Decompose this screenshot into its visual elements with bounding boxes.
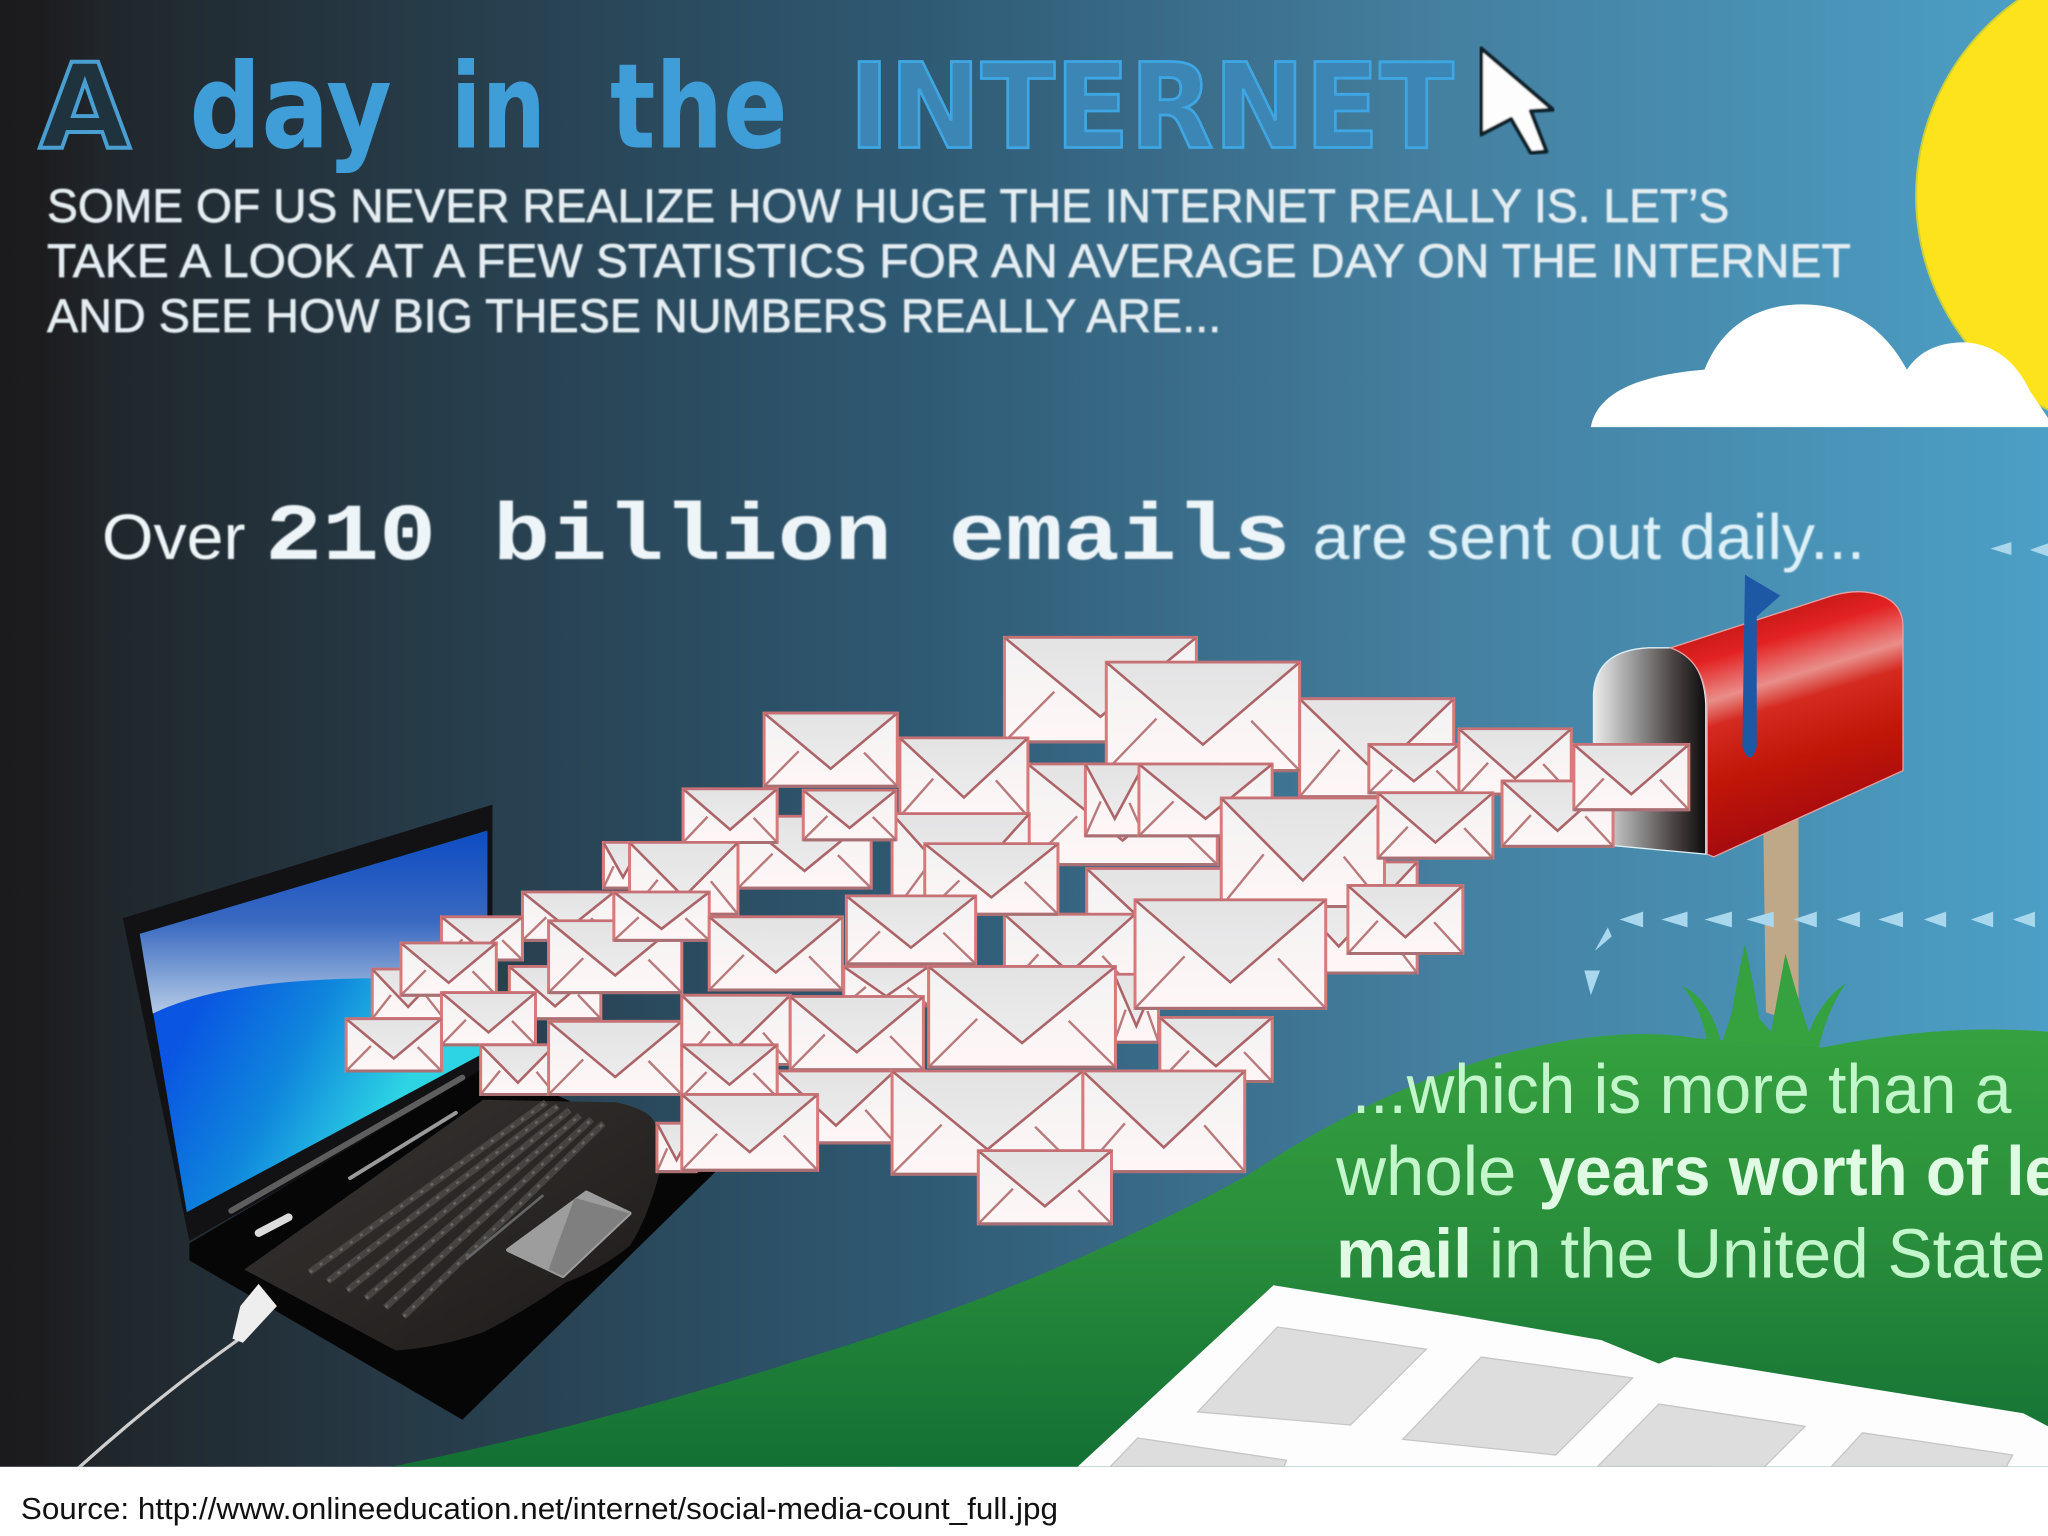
envelope	[1004, 914, 1135, 991]
title: the	[610, 39, 788, 176]
envelope	[346, 1019, 441, 1071]
envelope	[929, 967, 1115, 1067]
envelope	[683, 789, 777, 842]
email headline: Over	[102, 501, 246, 573]
mailbox red body	[1671, 592, 1903, 857]
envelope	[892, 814, 1029, 914]
envelope	[509, 967, 601, 1019]
envelope	[682, 1095, 818, 1170]
title	[39, 39, 1454, 176]
envelope	[978, 1151, 1112, 1224]
email headline: are sent out daily...	[1313, 501, 1865, 573]
cloud	[1591, 304, 2048, 427]
letter mail comparison text: whole	[1335, 1132, 1516, 1210]
envelope	[657, 1123, 696, 1172]
envelope	[844, 967, 929, 1006]
envelope	[682, 995, 790, 1064]
envelope	[1348, 886, 1463, 953]
letter mail comparison text: ...which is more than a	[1352, 1050, 2012, 1128]
envelope	[1087, 869, 1256, 973]
intro paragraph: SOME OF US NEVER REALIZE HOW HUGE THE INTERNET REALLY IS. LET’S	[47, 179, 1729, 232]
envelope	[1369, 744, 1459, 793]
envelope	[1459, 729, 1571, 794]
title: day	[189, 39, 392, 176]
envelope	[682, 1045, 777, 1097]
envelope	[925, 844, 1058, 914]
title: in	[451, 39, 546, 176]
envelope swarm	[346, 637, 1689, 1224]
envelope	[1114, 974, 1159, 1042]
envelope	[1574, 744, 1689, 810]
envelope	[1378, 793, 1493, 858]
trackpad	[466, 1192, 630, 1276]
envelope	[900, 738, 1028, 816]
grass tuft	[1682, 944, 1846, 1051]
envelope	[1160, 1017, 1272, 1081]
intro paragraph: TAKE A LOOK AT A FEW STATISTICS FOR AN AVERAGE DAY ON THE INTERNET	[47, 234, 1851, 287]
envelope	[1083, 1071, 1245, 1172]
letter mail comparison text	[1335, 1050, 2048, 1292]
envelope	[603, 842, 643, 888]
envelope	[1004, 637, 1196, 742]
intro paragraph	[47, 179, 1851, 342]
intro paragraph: AND SEE HOW BIG THESE NUMBERS REALLY ARE...	[47, 289, 1221, 342]
envelope	[372, 969, 444, 1019]
laptop base	[189, 1064, 718, 1420]
envelope	[777, 1071, 895, 1143]
newspaper	[1078, 1285, 2048, 1467]
letter mail comparison text: mail	[1336, 1214, 1472, 1292]
envelope	[1139, 764, 1272, 836]
cursor icon	[1481, 48, 1553, 153]
envelope	[614, 892, 709, 940]
laptop	[78, 805, 718, 1468]
laptop lid	[123, 805, 492, 1241]
envelope	[630, 842, 738, 914]
envelope	[1260, 862, 1417, 973]
envelope	[790, 997, 923, 1070]
mailbox	[1593, 575, 1903, 857]
envelope	[1085, 764, 1144, 836]
title: A	[39, 39, 131, 176]
hinge strips	[231, 1078, 462, 1233]
dashed route arrow	[1584, 912, 2035, 995]
screen highlight	[140, 831, 487, 1014]
source caption: Source: http://www.onlineeducation.net/internet/social-media-count_full.jpg	[21, 1491, 1058, 1526]
envelope	[522, 892, 614, 940]
mailbox post	[1763, 810, 1799, 1019]
keyboard keys	[310, 1102, 603, 1317]
envelope	[1106, 662, 1300, 771]
envelope	[803, 790, 896, 840]
email headline	[102, 493, 1865, 584]
envelope	[481, 1045, 555, 1095]
envelope	[1502, 781, 1613, 846]
small dashed arrow top right	[1991, 542, 2048, 556]
envelope	[1028, 764, 1217, 865]
mailbox opening	[1593, 648, 1706, 854]
USB plug	[232, 1284, 277, 1343]
envelope	[1300, 699, 1454, 797]
envelope	[846, 896, 976, 964]
sun	[1916, 0, 2048, 435]
envelope	[892, 1071, 1083, 1174]
green hill	[392, 1029, 2048, 1467]
envelope	[764, 713, 897, 786]
envelope	[709, 917, 842, 990]
envelope	[1221, 798, 1384, 906]
email headline: 210 billion emails	[265, 493, 1290, 584]
envelope	[441, 993, 536, 1045]
envelope	[1135, 900, 1326, 1008]
title: INTERNET	[849, 39, 1454, 176]
envelope	[401, 943, 496, 995]
envelope	[441, 917, 522, 960]
USB cable	[78, 1340, 238, 1468]
envelope	[549, 921, 682, 993]
keyboard deck	[244, 1100, 660, 1351]
letter mail comparison text: in the United State	[1489, 1214, 2045, 1292]
newspaper photo panels	[1110, 1327, 2013, 1467]
laptop screen	[140, 831, 487, 1212]
mailbox flag	[1742, 575, 1780, 758]
envelope	[738, 816, 871, 888]
envelope	[549, 1021, 682, 1095]
